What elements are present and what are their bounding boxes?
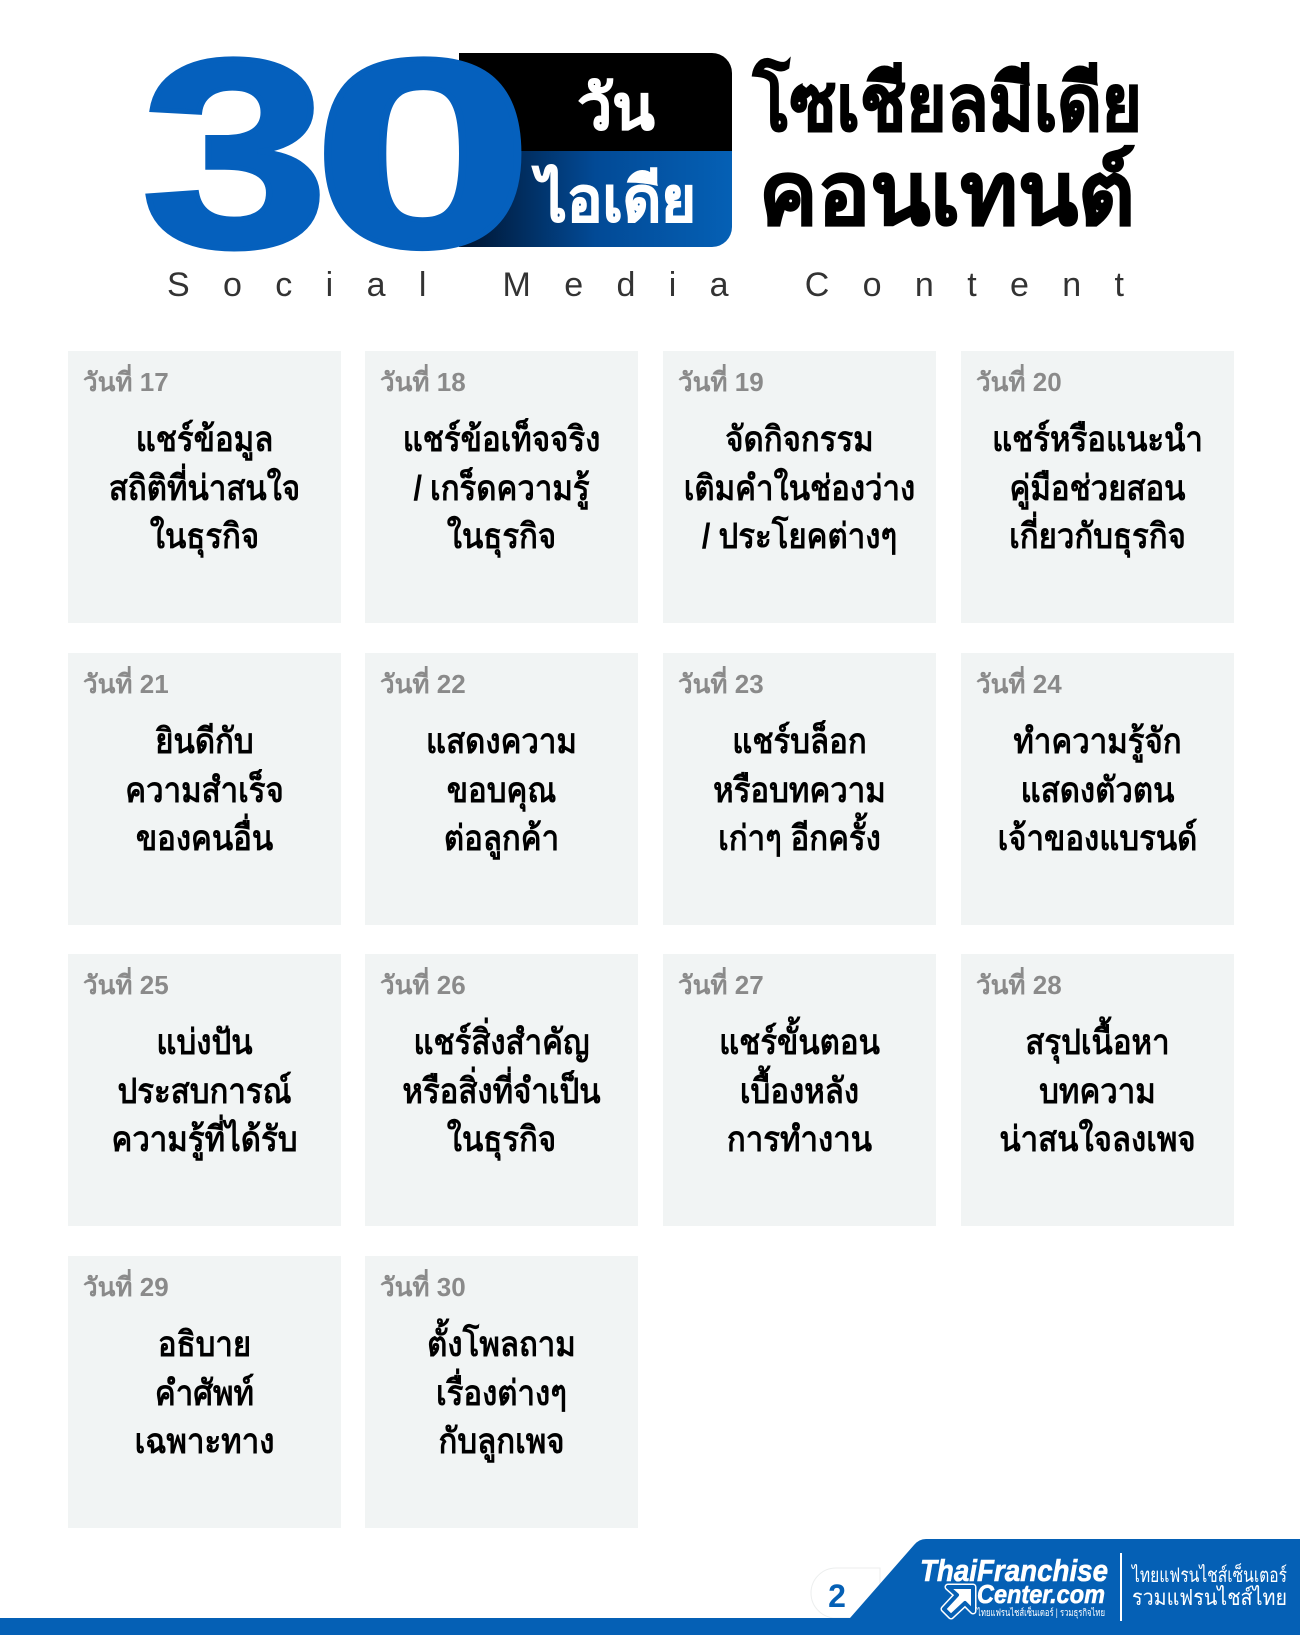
- big number 30: 3: [141, 3, 329, 303]
- card: day 21: [68, 653, 341, 925]
- card: day 27: การทำงาน: [727, 1120, 872, 1159]
- card: day 22: ขอบคุณ: [447, 770, 556, 810]
- card: day 20: [961, 351, 1234, 623]
- card: day 20: เกี่ยวกับธุรกิจ: [1009, 517, 1186, 556]
- logo wordmark: [920, 1553, 1108, 1619]
- card: day 25: [68, 954, 341, 1226]
- card: day 23: เก่าๆ อีกครั้ง: [718, 819, 881, 858]
- card: day 17: สถิติที่น่าสนใจ: [109, 468, 300, 508]
- card: day 26: [365, 954, 638, 1226]
- title line 2: คอนเทนต์: [759, 144, 1135, 243]
- card: day 29: คำศัพท์: [155, 1374, 254, 1412]
- card: day 20: แชร์หรือแนะนำ: [992, 420, 1203, 459]
- card: day 23: [663, 653, 936, 925]
- card: day 22: ต่อลูกค้า: [444, 819, 559, 858]
- card: day 25: วันที่ 25: [83, 970, 169, 1000]
- card: day 24: เจ้าของแบรนด์: [998, 819, 1197, 858]
- footer: [0, 1539, 1300, 1635]
- card: day 27: วันที่ 27: [678, 970, 764, 1000]
- logo wordmark: Center.com: [977, 1579, 1105, 1609]
- card: day 30: ตั้งโพลถาม: [427, 1325, 576, 1364]
- card: day 17: ในธุรกิจ: [150, 517, 259, 556]
- big number 30: [141, 3, 534, 304]
- logo wordmark: ThaiFranchise: [920, 1553, 1108, 1588]
- card: day 26: วันที่ 26: [380, 970, 466, 1000]
- card: day 22: แสดงความ: [426, 722, 577, 761]
- card: day 21: ความสำเร็จ: [125, 770, 284, 810]
- card: day 30: [365, 1256, 638, 1528]
- card: day 21: ของคนอื่น: [136, 819, 273, 858]
- box word: ideas: ไอเดีย: [531, 164, 696, 235]
- footer blue band: [0, 1539, 1300, 1635]
- card: day 19: /ประโยคต่างๆ: [702, 517, 897, 556]
- card: day 22: วันที่ 22: [380, 669, 466, 699]
- title line 1: โซเชียลมีเดีย: [752, 57, 1142, 147]
- card: day 24: วันที่ 24: [976, 669, 1062, 699]
- box word: days: วัน: [577, 74, 655, 143]
- card: day 17: วันที่ 17: [83, 367, 169, 397]
- card: day 25: ความรู้ที่ได้รับ: [111, 1120, 298, 1159]
- card: day 30: เรื่องต่างๆ: [436, 1374, 567, 1412]
- card: day 20: คู่มือช่วยสอน: [1010, 468, 1185, 508]
- card: day 26: ในธุรกิจ: [447, 1120, 556, 1159]
- black and blue title box: [459, 53, 732, 247]
- page number tab: [811, 1568, 880, 1618]
- card: day 18: [365, 351, 638, 623]
- card: day 21: ยินดีกับ: [155, 722, 254, 761]
- card: day 19: วันที่ 19: [678, 367, 764, 397]
- card: day 29: อธิบาย: [158, 1325, 251, 1364]
- logo wordmark: ไทยแฟรนไชส์เซ็นเตอร์ | รวมธุรกิจไทย: [976, 1605, 1105, 1619]
- logo divider: [1120, 1553, 1122, 1621]
- header title: [141, 3, 1142, 304]
- card: day 30: กับลูกเพจ: [438, 1422, 565, 1461]
- card: day 18: ในธุรกิจ: [447, 517, 556, 556]
- card: day 19: เติมคำในช่องว่าง: [684, 468, 915, 508]
- page number: 2: [828, 1578, 846, 1614]
- card: day 19: จัดกิจกรรม: [725, 420, 874, 459]
- card: day 29: เฉพาะทาง: [135, 1422, 274, 1461]
- card: day 29: วันที่ 29: [83, 1272, 169, 1302]
- card: day 17: แชร์ข้อมูล: [136, 420, 273, 459]
- subtitle: S o c i a l M e d i a C o n t e n t: [167, 266, 1125, 304]
- card: day 27: แชร์ขั้นตอน: [719, 1023, 880, 1062]
- card: day 24: ทำความรู้จัก: [1013, 722, 1182, 761]
- card: day 18: /เกร็ดความรู้: [413, 468, 590, 508]
- card: day 29: [68, 1256, 341, 1528]
- card: day 18: วันที่ 18: [380, 367, 466, 397]
- card: day 28: บทความ: [1039, 1072, 1156, 1110]
- card: day 20: วันที่ 20: [976, 367, 1062, 397]
- card: day 17: [68, 351, 341, 623]
- icon: logo arrow: [944, 1587, 973, 1616]
- card: day 28: น่าสนใจลงเพจ: [999, 1120, 1196, 1159]
- card: day 26: หรือสิ่งที่จำเป็น: [402, 1072, 601, 1110]
- card: day 21: วันที่ 21: [83, 669, 169, 699]
- card: day 23: แชร์บล็อก: [732, 722, 867, 761]
- card: day 24: [961, 653, 1234, 925]
- big number 30: 0: [312, 4, 534, 304]
- card: day 18: แชร์ข้อเท็จจริง: [403, 420, 600, 459]
- card: day 23: วันที่ 23: [678, 669, 764, 699]
- card: day 27: เบื้องหลัง: [740, 1072, 859, 1110]
- card: day 28: สรุปเนื้อหา: [1025, 1023, 1170, 1062]
- footer slogan line 2: รวมแฟรนไชส์ไทย: [1132, 1585, 1287, 1610]
- card: day 22: [365, 653, 638, 925]
- card: day 25: แบ่งปัน: [156, 1023, 253, 1062]
- card: day 19: [663, 351, 936, 623]
- card: day 27: [663, 954, 936, 1226]
- card: day 28: วันที่ 28: [976, 970, 1062, 1000]
- card: day 24: แสดงตัวตน: [1021, 770, 1174, 810]
- card: day 30: วันที่ 30: [380, 1272, 466, 1302]
- card: day 23: หรือบทความ: [713, 770, 886, 810]
- card: day 26: แชร์สิ่งสำคัญ: [413, 1023, 590, 1062]
- card: day 25: ประสบการณ์: [117, 1072, 291, 1110]
- card: day 28: [961, 954, 1234, 1226]
